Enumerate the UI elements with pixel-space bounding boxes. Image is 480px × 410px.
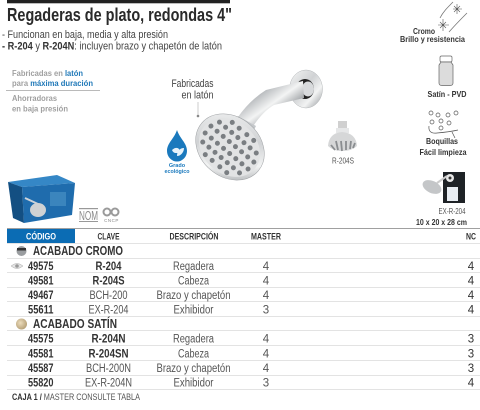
certification logos NOM and CNCP: CNCP xyxy=(104,218,119,223)
rows: cromo: Cabeza xyxy=(178,276,209,288)
rows: cromo: EX-R-204 xyxy=(88,304,129,316)
rows: cromo: R-204 xyxy=(96,261,122,273)
benefits text block: Fabricadas en latón xyxy=(12,69,83,78)
rows: cromo: 4 xyxy=(468,276,475,288)
rows: satín: 4 xyxy=(263,363,270,375)
rows: cromo: 4 xyxy=(263,261,270,273)
table xyxy=(7,228,480,390)
wall flange xyxy=(290,70,322,108)
callout: fabricadas en latón: en latón xyxy=(182,90,214,102)
section: acabado cromo: ACABADO CROMO xyxy=(33,244,123,258)
rows: cromo: 4 xyxy=(263,276,270,288)
nozzles xyxy=(191,110,268,185)
section: acabado satín: ACABADO SATÍN xyxy=(33,316,117,331)
benefits text block: en baja presión xyxy=(12,104,68,114)
table header: CÓDIGO xyxy=(26,230,56,242)
rows: satín: 3 xyxy=(468,363,474,375)
rows: satín: 45575 xyxy=(28,334,54,346)
exhibitor EX-R-204: 10 x 20 x 28 cm xyxy=(416,217,467,227)
icon: eco water drop: ecológico xyxy=(164,169,190,175)
rows: satín: 45587 xyxy=(28,363,54,375)
rows: satín: 4 xyxy=(263,348,270,360)
benefits text block xyxy=(6,69,100,114)
rows: satín xyxy=(28,334,475,390)
icon: eco water drop xyxy=(164,130,190,175)
rows: cromo: Brazo y chapetón xyxy=(156,290,230,302)
icon: chrome finish: Brillo y resistencia xyxy=(400,34,465,44)
rows: satín: R-204N xyxy=(92,334,126,346)
certification logos NOM and CNCP: NOM xyxy=(79,208,98,223)
rows: cromo: 49467 xyxy=(28,290,54,302)
rows: cromo: 49581 xyxy=(28,276,54,288)
rows: cromo: Exhibidor xyxy=(174,304,214,316)
icon: chrome finish xyxy=(400,2,467,44)
small shower head R-204S: R-204S xyxy=(332,156,354,166)
callout: fabricadas en latón: Fabricadas xyxy=(172,78,214,90)
rows: cromo: R-204S xyxy=(92,276,125,288)
icon: nozzles easy clean xyxy=(420,111,467,157)
rows: cromo: BCH-200 xyxy=(90,290,128,302)
icon: chrome finish: Cromo xyxy=(413,26,435,36)
rows: cromo: Regadera xyxy=(173,261,214,273)
rows: cromo: 4 xyxy=(468,304,475,316)
rows: satín: 3 xyxy=(468,348,474,360)
rows: cromo: 4 xyxy=(263,290,270,302)
rows: satín: Regadera xyxy=(173,334,214,346)
table header: NC xyxy=(466,232,476,242)
table header xyxy=(7,229,476,243)
rows: satín: Exhibidor xyxy=(174,378,214,390)
rows: satín: 3 xyxy=(263,378,269,390)
icon: nozzles easy clean: Fácil limpieza xyxy=(420,147,467,157)
shower head with arm xyxy=(182,70,322,194)
rows: cromo: 4 xyxy=(468,290,475,302)
feature bullets: - R-204 y R-204N: incluyen brazo y chapetón de latón xyxy=(2,40,222,52)
icon: satin PVD xyxy=(428,56,466,99)
rows: satín: BCH-200N xyxy=(86,363,131,375)
section: acabado cromo xyxy=(16,244,123,258)
small shower head R-204S xyxy=(328,121,357,166)
table header: CLAVE xyxy=(98,232,120,242)
rows: satín: 3 xyxy=(468,334,474,346)
shower head disc xyxy=(182,100,278,194)
icon: eye xyxy=(11,264,23,268)
top black bar xyxy=(7,0,230,3)
table header: MASTER xyxy=(251,232,281,242)
rows: satín: 45581 xyxy=(28,348,54,360)
feature bullets: - Funcionan en baja, media y alta presión xyxy=(2,29,168,41)
rows: cromo: 4 xyxy=(468,261,475,273)
footer note: CAJA 1 / MASTER CONSULTE TABLA xyxy=(12,392,140,402)
rows: satín: EX-R-204N xyxy=(85,378,132,390)
benefits text block: para máxima duración xyxy=(12,79,93,88)
icon: nozzles easy clean: Boquillas xyxy=(426,136,458,146)
benefits text block: Ahorradoras xyxy=(12,94,58,103)
shower collar xyxy=(234,116,256,136)
callout: fabricadas en latón xyxy=(172,78,214,117)
rows: cromo: 55611 xyxy=(28,304,54,316)
exhibitor EX-R-204: EX-R-204 xyxy=(438,206,466,216)
rows: satín: R-204SN xyxy=(88,348,128,360)
rows: cromo: 49575 xyxy=(28,261,54,273)
arm xyxy=(238,81,304,128)
rows: satín: 4 xyxy=(263,334,270,346)
section: acabado satín xyxy=(16,316,117,331)
rows: satín: 55820 xyxy=(28,378,54,390)
feature bullets xyxy=(2,29,222,52)
exhibitor EX-R-204 xyxy=(416,172,467,227)
product box xyxy=(8,175,75,223)
rows: satín: 4 xyxy=(468,378,475,390)
table header: DESCRIPCIÓN xyxy=(170,230,218,242)
icon: eco water drop: Grado xyxy=(169,163,186,169)
rows: satín: Cabeza xyxy=(178,348,209,360)
rows: cromo xyxy=(28,261,475,316)
icon: satin PVD: Satín - PVD xyxy=(428,89,466,99)
rows: cromo: 3 xyxy=(263,304,269,316)
title: Regaderas de plato, redondas 4" xyxy=(7,4,232,25)
rows: satín: Brazo y chapetón xyxy=(156,363,230,375)
